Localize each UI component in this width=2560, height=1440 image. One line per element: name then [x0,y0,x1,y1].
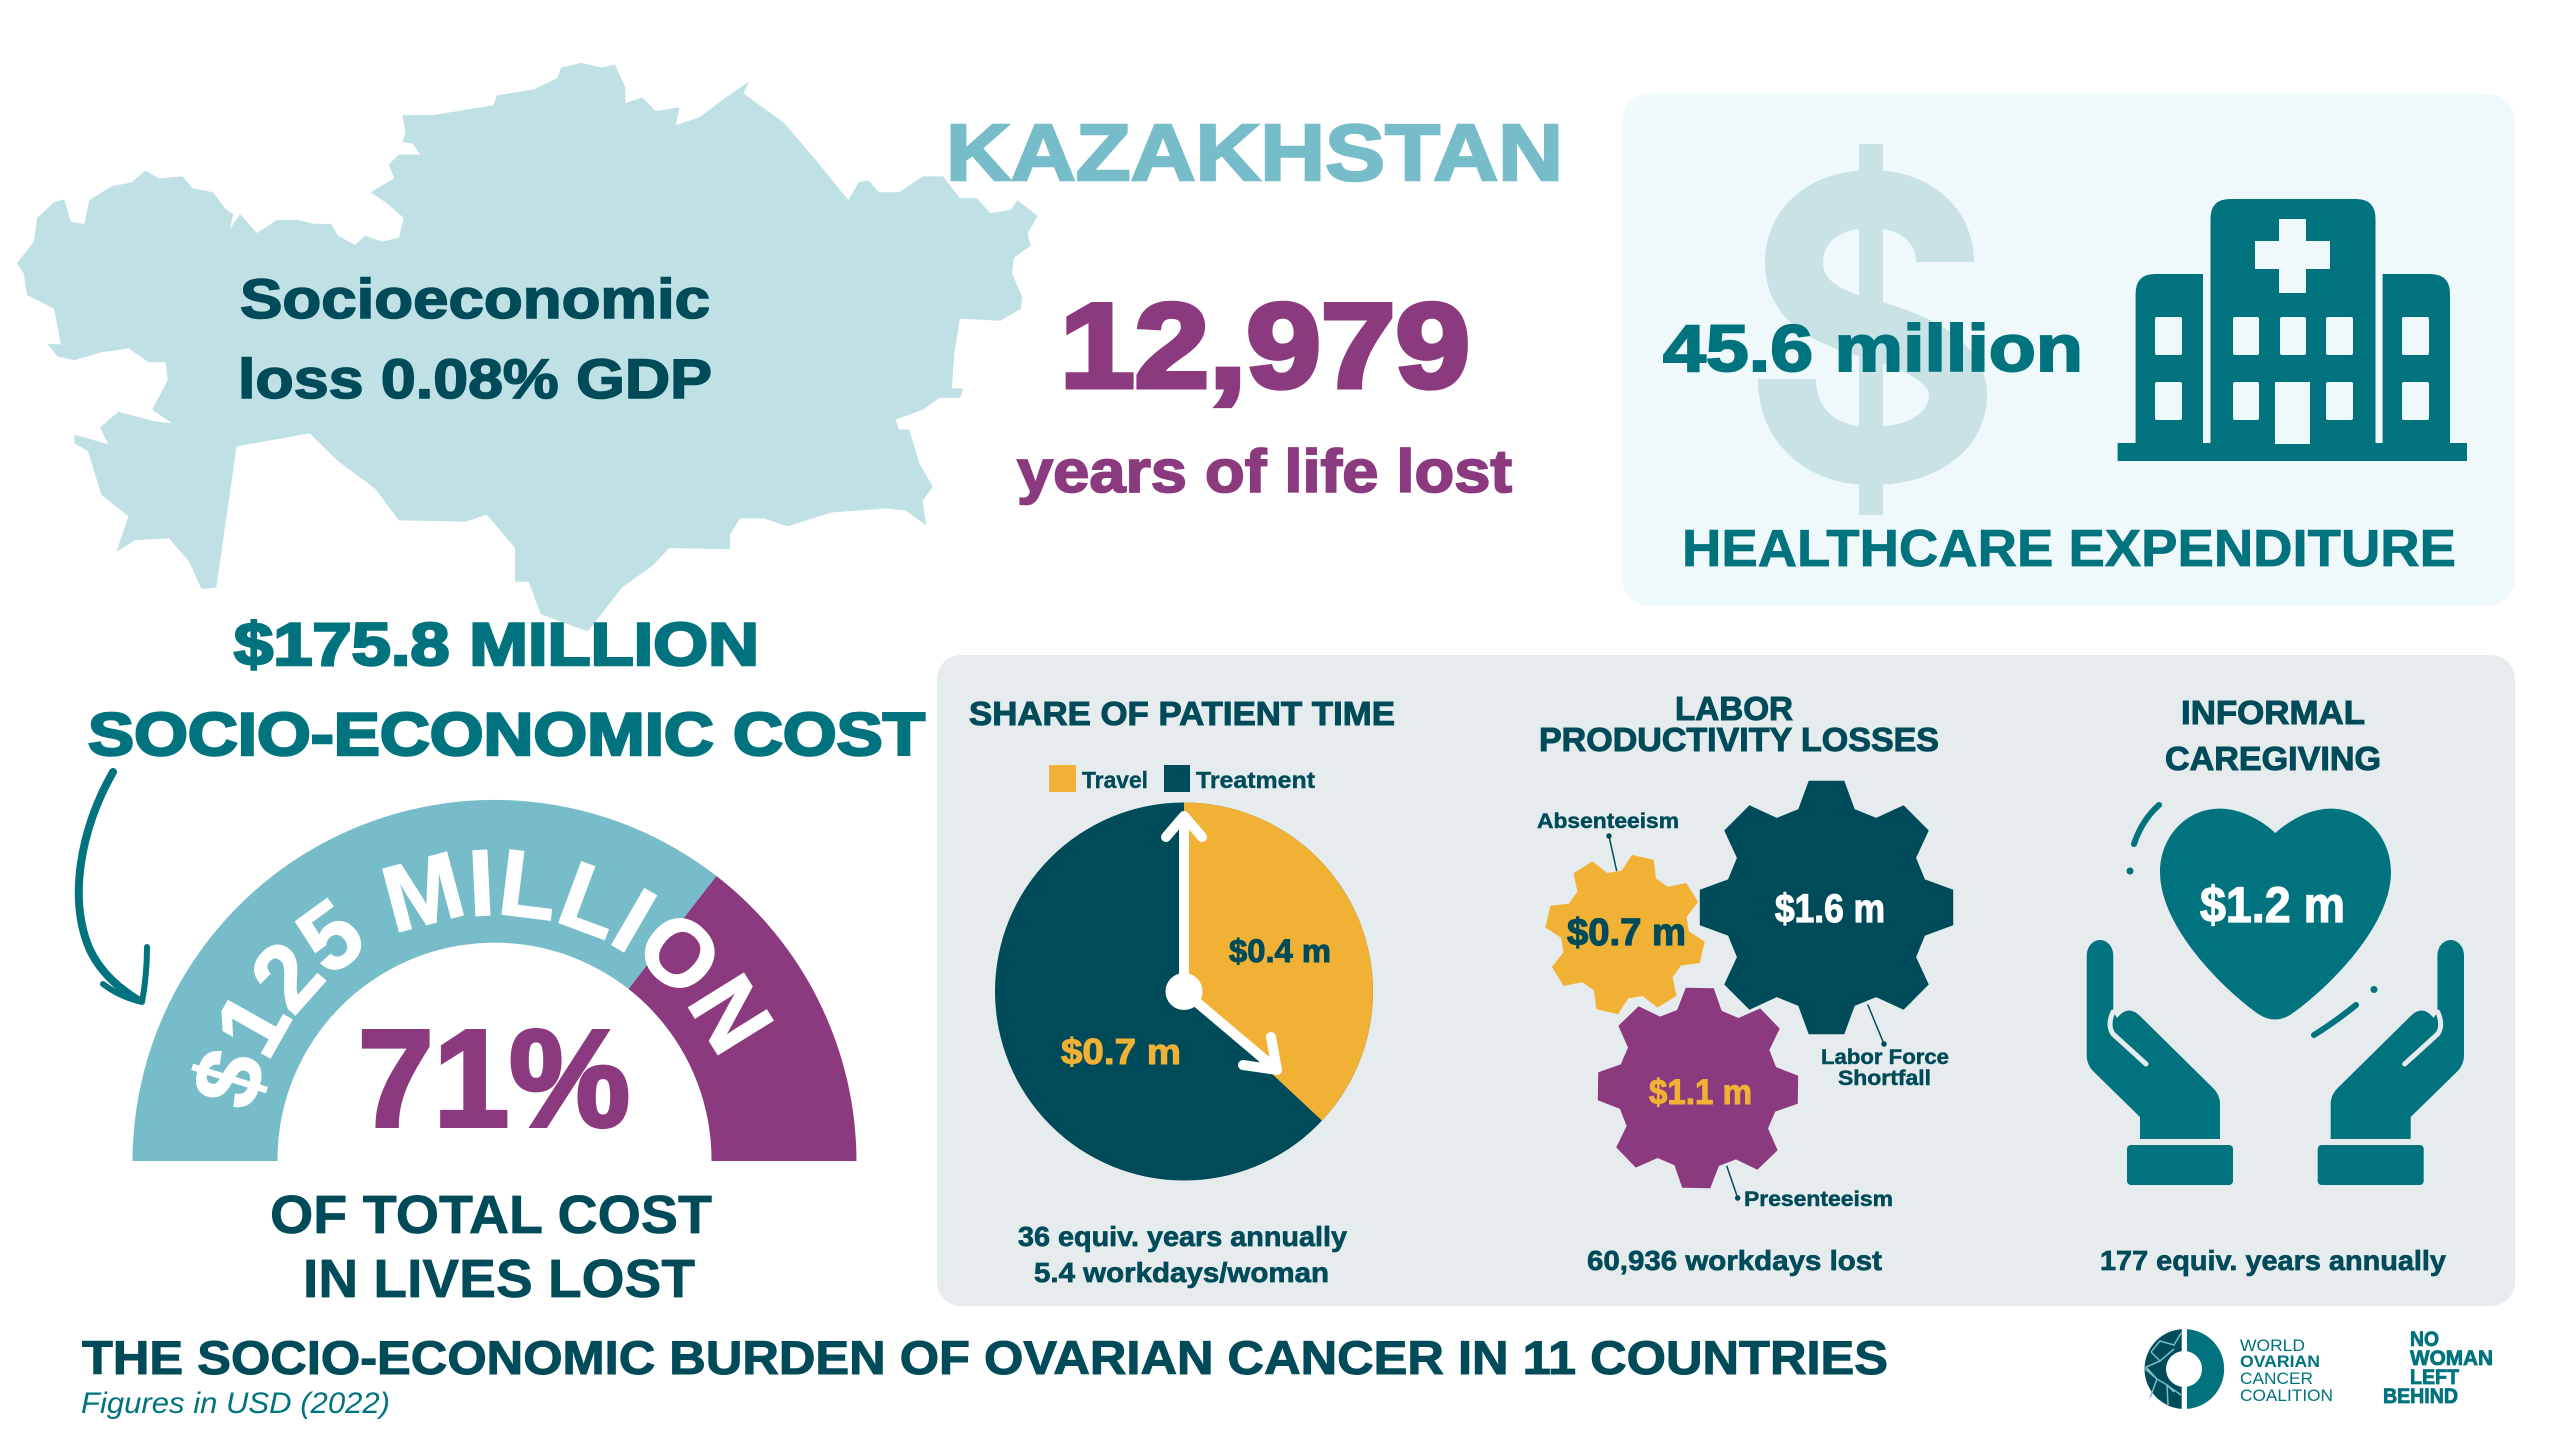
chart: pie clock: $0.4 m [1229,933,1331,969]
map of Kazakhstan [17,63,1038,631]
heading [2165,694,2381,777]
icon: left hand [2087,940,2233,1185]
map label: socioeconomic loss: Socioeconomic [240,267,710,330]
gear values: $0.7 m [1567,912,1686,954]
heading: INFORMAL [2181,694,2365,731]
legend: Travel [1082,767,1148,793]
panel: labor productivity losses [1530,690,1953,1276]
heading: SHARE OF PATIENT TIME [969,695,1395,732]
gauge caption: IN LIVES LOST [303,1249,695,1309]
gauge arc label: $125 MILLION [191,849,774,1108]
caption: 5.4 workdays/woman [1034,1257,1329,1288]
heading: total socio-economic cost: SOCIO-ECONOMIC COST [88,701,925,768]
logo wordmark: WORLD [2240,1337,2305,1355]
callout labels: Absenteeism [1537,810,1679,833]
heading [1539,690,1939,758]
panel: informal caregiving [2087,694,2464,1276]
panel: share of patient time [969,695,1395,1288]
icon: hospital [2118,199,2467,461]
panel: healthcare expenditure [1622,94,2515,606]
logo wordmark [2240,1337,2333,1405]
chart: pie clock [995,802,1373,1180]
caption: 177 equiv. years annually [2100,1245,2446,1276]
healthcare amount: 45.6 million [1663,311,2083,385]
heart value: $1.2 m [2200,877,2345,933]
heading: country name: KAZAKHSTAN [946,108,1563,197]
panel: cost breakdown background [937,655,2515,1306]
legend [1049,765,1315,793]
logo: No Woman Left Behind: NO [2410,1328,2439,1351]
logo wordmark: CANCER [2240,1370,2313,1388]
arrow: cost to gauge [79,772,147,1002]
callout labels: Labor Force [1821,1046,1949,1069]
icon: heart [2160,809,2391,1020]
icon: right hand [2318,940,2464,1185]
heading: CAREGIVING [2165,740,2381,777]
logo: No Woman Left Behind: BEHIND [2383,1385,2458,1408]
chart: gauge of lives lost share [132,800,856,1161]
heading: total socio-economic cost: $175.8 MILLION [234,611,759,678]
map label: socioeconomic loss [238,267,712,410]
logo mark [2144,1329,2224,1409]
gear: labor force shortfall [1700,781,1953,1034]
logo: World Ovarian Cancer Coalition [2144,1329,2333,1409]
heading: PRODUCTIVITY LOSSES [1539,721,1939,758]
gear: absenteeism [1530,840,1720,1029]
panel: country map [17,63,1038,631]
gauge caption: OF TOTAL COST [270,1185,712,1245]
gear values: $1.1 m [1649,1073,1752,1112]
callout labels [1537,810,1949,1211]
chart: pie clock: $0.7 m [1061,1031,1181,1072]
stat: years of life lost number: 12,979 [1060,279,1470,413]
gauge percent: 71% [358,1002,630,1156]
caption [1018,1221,1347,1288]
decorative sparks [2128,805,2376,1035]
stat: years of life lost label: years of life lost [1017,438,1512,505]
logo: No Woman Left Behind [2383,1328,2493,1408]
gauge caption [270,1185,712,1309]
gear: presenteeism [1596,986,1800,1190]
callout labels: Shortfall [1838,1067,1931,1090]
legend: Treatment [1196,767,1315,793]
callout leaders [1607,834,1886,1200]
footer title: THE SOCIO-ECONOMIC BURDEN OF OVARIAN CANCER IN 11 COUNTRIES [82,1331,1888,1384]
heading: LABOR [1675,690,1793,727]
footer note: Figures in USD (2022) [81,1387,390,1420]
callout labels: Presenteeism [1744,1188,1893,1211]
heading: total socio-economic cost [88,611,925,768]
gear values: $1.6 m [1775,887,1885,931]
logo: No Woman Left Behind: WOMAN [2410,1347,2493,1370]
logo wordmark: OVARIAN [2240,1353,2320,1371]
caption: 60,936 workdays lost [1587,1245,1882,1276]
icon: dollar sign [1787,144,1958,515]
logo: No Woman Left Behind: LEFT [2410,1366,2459,1389]
caption: 36 equiv. years annually [1018,1221,1347,1252]
logo wordmark: COALITION [2240,1387,2333,1405]
healthcare label: HEALTHCARE EXPENDITURE [1682,520,2456,578]
gear values [1567,887,1885,1112]
map label: socioeconomic loss: loss 0.08% GDP [238,347,712,410]
